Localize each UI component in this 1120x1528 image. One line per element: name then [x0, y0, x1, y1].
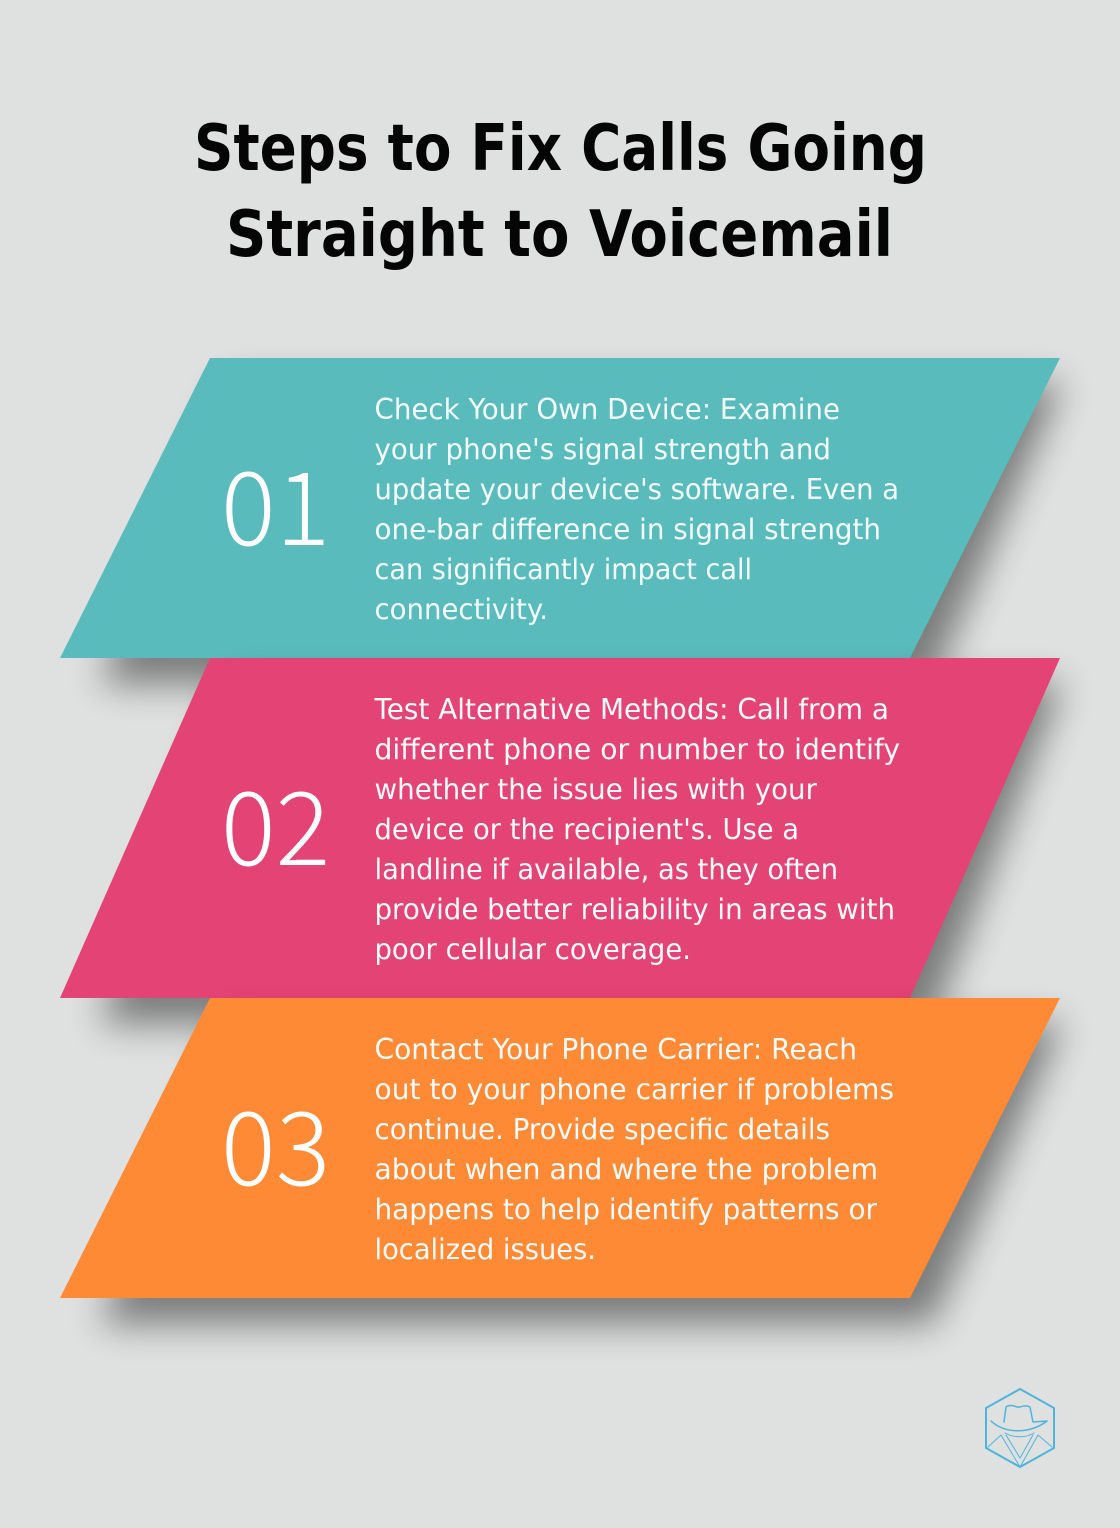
step 02 text: different phone or number to identify	[374, 733, 900, 766]
panel shadow	[100, 1023, 1062, 1324]
step 01 text: update your device's software. Even a	[374, 473, 899, 506]
step 01 text: can significantly impact call	[374, 553, 752, 586]
panel shadow	[100, 683, 1062, 1024]
step 03 text: out to your phone carrier if problems	[374, 1073, 894, 1106]
title: Steps to Fix Calls Going	[194, 111, 927, 186]
step 01 text: connectivity.	[374, 593, 548, 626]
teal parallelogram	[60, 358, 1060, 658]
number 03: 03	[221, 1068, 330, 1215]
step 03 text: Contact Your Phone Carrier: Reach	[374, 1033, 857, 1066]
panel: step 01	[60, 358, 1062, 684]
pink parallelogram	[60, 658, 1060, 998]
step 01 text: Check Your Own Device: Examine	[374, 393, 840, 426]
step 02 text: poor cellular coverage.	[374, 933, 691, 966]
step 03 text: continue. Provide specific details	[374, 1113, 830, 1146]
step 03 text	[374, 1033, 894, 1266]
step 02 text: Test Alternative Methods: Call from a	[374, 693, 889, 726]
orange parallelogram	[60, 998, 1060, 1298]
step 01 text	[374, 393, 899, 626]
step 03 text: happens to help identify patterns or	[374, 1193, 877, 1226]
step 02 text: whether the issue lies with your	[374, 773, 817, 806]
panel: step 02	[60, 658, 1062, 1024]
step 02 text: device or the recipient's. Use a	[374, 813, 799, 846]
panel shadow	[100, 383, 1062, 684]
number 02: 02	[221, 748, 330, 895]
step 03 text: about when and where the problem	[374, 1153, 878, 1186]
number 01: 01	[221, 428, 330, 575]
title: Straight to Voicemail	[226, 197, 893, 272]
step 02 text: provide better reliability in areas with	[374, 893, 895, 926]
title	[194, 111, 927, 272]
step 02 text: landline if available, as they often	[374, 853, 838, 886]
icon: logo hexagon with spy hat	[986, 1389, 1054, 1467]
panel: step 03	[60, 998, 1062, 1324]
step 01 text: one-bar difference in signal strength	[374, 513, 881, 546]
step 03 text: localized issues.	[374, 1233, 596, 1266]
step 02 text	[374, 693, 900, 966]
step 01 text: your phone's signal strength and	[374, 433, 831, 466]
